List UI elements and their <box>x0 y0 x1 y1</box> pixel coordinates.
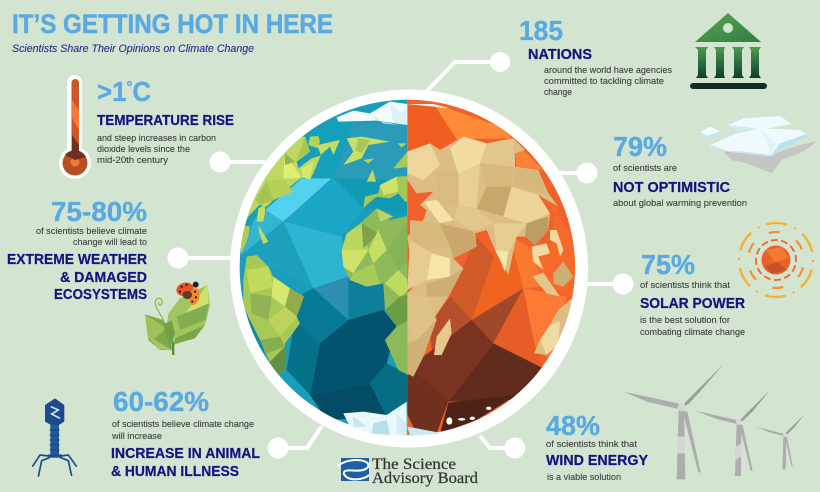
polar ice <box>337 102 450 436</box>
eurasia and africa land <box>407 137 558 377</box>
solar power block <box>640 249 745 337</box>
logo: The Science Advisory Board: The Science <box>372 456 456 473</box>
temperature rise block: and steep increases in carbon <box>97 132 216 143</box>
nations block: 185 <box>519 15 563 46</box>
icon: sun <box>725 209 820 311</box>
japan, indonesia and australia land <box>550 230 563 257</box>
title: IT’S GETTING HOT IN HERE <box>12 9 333 39</box>
icon: government building <box>690 13 767 89</box>
nations block: committed to tackling climate <box>544 75 664 86</box>
temperature rise block: C <box>132 76 151 107</box>
illness block: will increase <box>111 430 162 441</box>
not optimistic block: 79% <box>613 131 667 162</box>
wind energy block: 48% <box>546 410 600 441</box>
illness block: INCREASE IN ANIMAL <box>111 445 260 462</box>
icon: leaf with ladybug <box>145 281 210 355</box>
greenland and islands <box>343 137 390 165</box>
icon: wind turbines <box>623 364 804 479</box>
icon: melting ice <box>700 116 817 173</box>
illness block: & HUMAN ILLNESS <box>111 463 239 480</box>
solar power block: of scientists think that <box>640 279 730 290</box>
solar power block: SOLAR POWER <box>640 295 745 312</box>
not optimistic block: NOT OPTIMISTIC <box>613 179 730 196</box>
extreme weather block: 75-80% <box>51 196 147 227</box>
temperature rise block: mid-20th century <box>97 154 168 165</box>
logo: The Science Advisory Board <box>338 456 478 487</box>
wind energy block <box>546 410 648 482</box>
extreme weather block: of scientists believe climate <box>36 225 147 236</box>
extreme weather block: & DAMAGED <box>60 269 147 286</box>
temperature rise block: TEMPERATURE RISE <box>97 112 234 129</box>
madagascar <box>434 318 452 355</box>
temperature rise block: ° <box>126 79 132 96</box>
temperature rise block: dioxide levels since the <box>97 143 190 154</box>
solar power block: combating climate change <box>640 326 745 337</box>
illness block: of scientists believe climate change <box>112 418 254 429</box>
extreme weather block: EXTREME WEATHER <box>7 251 147 268</box>
not optimistic block: about global warming prevention <box>613 197 747 208</box>
wind energy block: is a viable solution <box>547 471 621 482</box>
not optimistic block <box>613 131 747 208</box>
extreme weather block: ECOSYSTEMS <box>54 286 147 303</box>
nations block: NATIONS <box>528 46 592 63</box>
subtitle: Scientists Share Their Opinions on Climate Change <box>12 43 254 55</box>
antarctic ice specks <box>446 407 491 425</box>
solar power block: 75% <box>641 249 695 280</box>
nations block <box>519 15 672 97</box>
wind energy block: of scientists think that <box>546 438 637 449</box>
south america land <box>243 255 304 375</box>
nations block: around the world have agencies <box>544 64 672 75</box>
logo: The Science Advisory Board: Advisory Board <box>372 470 478 487</box>
nations block: change <box>544 86 572 97</box>
europe land <box>363 176 410 208</box>
africa land <box>342 208 408 374</box>
extreme weather block <box>7 196 147 303</box>
not optimistic block: of scientists are <box>613 162 677 173</box>
illness block: 60-62% <box>113 386 209 417</box>
temperature rise block: >1 <box>97 76 129 107</box>
illness block <box>111 386 260 480</box>
solar power block: is the best solution for <box>640 314 730 325</box>
wind energy block: WIND ENERGY <box>546 452 648 469</box>
extreme weather block: change will lead to <box>73 236 147 247</box>
globe <box>230 90 588 448</box>
north america land <box>237 136 410 255</box>
icon: thermometer <box>59 75 91 179</box>
temperature rise block <box>97 76 234 165</box>
connectors <box>168 52 634 458</box>
icon: bacteriophage <box>32 398 77 477</box>
